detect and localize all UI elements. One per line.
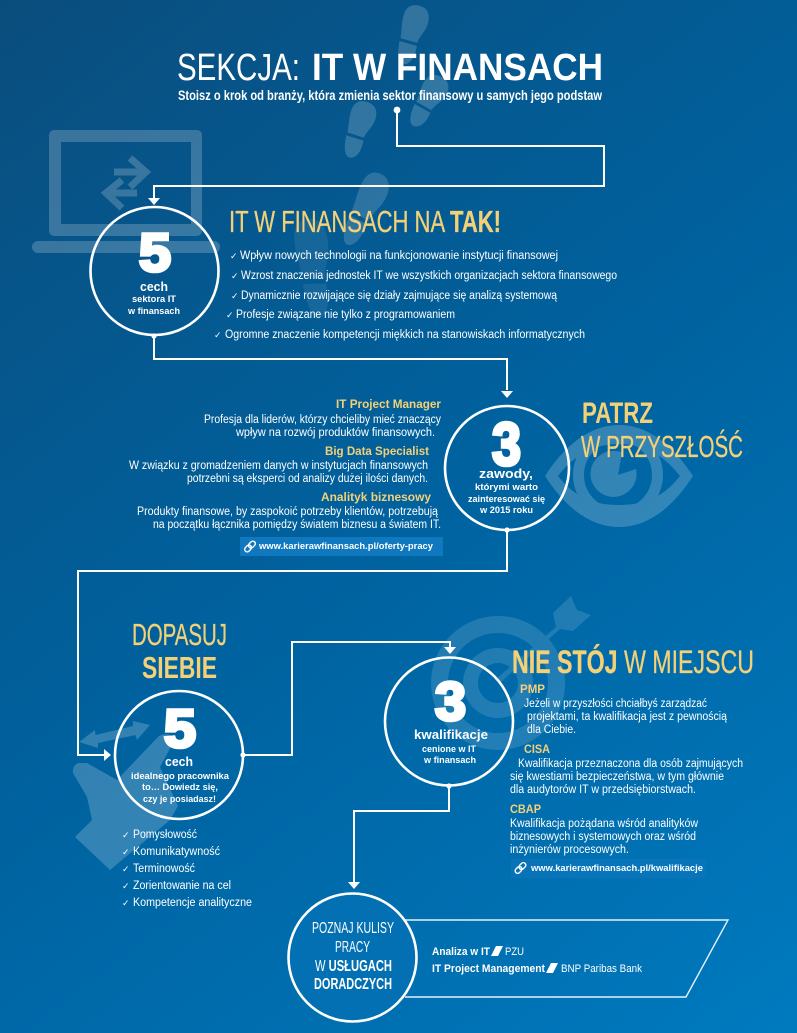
heading: dopasuj siebie: SIEBIE (142, 650, 217, 685)
callout: trapezoid: PZU (505, 946, 524, 958)
checklist: cechy pracownika: Komunikatywność (133, 846, 220, 858)
link box: kwalifikacje (511, 859, 706, 878)
circle: poznaj kulisy pracy: DORADCZYCH (314, 976, 392, 993)
qualifications: dla audytorów IT w przedsiębiorstwach. (510, 784, 696, 796)
circle: 5 cech pracownika: 5 (164, 699, 196, 759)
circle: 3 zawody: w 2015 roku (479, 505, 533, 515)
qualifications: się kwestiami bezpieczeństwa, w tym głównie (510, 771, 724, 783)
circle: 5 cech pracownika: cech (165, 754, 193, 769)
qualifications: PMP (520, 684, 545, 696)
connector: circle 4 to circle 5 (348, 783, 452, 889)
checklist: Wpływ nowych technologii na funkcjonowanie instytucji finansowej (240, 250, 558, 262)
checklist: ✓ (230, 252, 238, 262)
qualifications: projektami, ta kwalifikacja jest z pewnością (527, 711, 728, 723)
link box: kwalifikacje: www.karierawfinansach.pl/kwalifikacje (530, 863, 703, 874)
qualifications: biznesowych i systemowych oraz wśród (510, 831, 696, 843)
subtitle: Stoisz o krok od branży, która zmienia sektor finansowy u samych jego podstaw (178, 87, 602, 103)
panel: zawody: Big Data Specialist (325, 446, 429, 458)
checklist: Profesje związane nie tylko z programowaniem (236, 309, 455, 321)
circle: 3 kwalifikacje (385, 658, 513, 786)
circle: 5 cech sektora IT: cech (140, 279, 168, 294)
connector: circle 1 to circle 2 (151, 333, 513, 398)
checklist: cechy pracownika: Terminowość (133, 863, 195, 875)
title: SEKCJA: (177, 47, 300, 89)
circle: 5 cech pracownika (115, 691, 243, 819)
circle: poznaj kulisy pracy: PRACY (335, 939, 370, 956)
callout: trapezoid (405, 920, 728, 997)
qualifications: dla Ciebie. (527, 724, 576, 736)
circle: 3 zawody: zawody, (479, 466, 533, 481)
icon: laptop (32, 130, 220, 253)
circle: 5 cech sektora IT: sektora IT (132, 294, 177, 304)
heading: dopasuj siebie: DOPASUJ (132, 617, 227, 652)
panel: zawody: Profesja dla liderów, którzy chcieliby mieć znaczący (204, 414, 441, 426)
qualifications: Kwalifikacja pożądana wśród analityków (510, 818, 699, 830)
circle: 3 kwalifikacje: kwalifikacje (414, 728, 488, 742)
circle: poznaj kulisy pracy: POZNAJ KULISY (312, 920, 394, 937)
title (177, 47, 603, 89)
circle: 3 zawody: 3 (492, 411, 521, 478)
panel: IT w finansach na tak (214, 204, 617, 341)
circle: 3 zawody: zainteresować się (468, 494, 545, 504)
link box: oferty pracy: www.karierawfinansach.pl/oferty-pracy (258, 541, 434, 552)
checklist: cechy pracownika: ✓ (122, 899, 130, 909)
qualifications: Jeżeli w przyszłości chciałbyś zarządzać (524, 698, 707, 710)
checklist: ✓ (226, 311, 234, 321)
checklist: ✓ (231, 292, 239, 302)
panel: zawody: Analityk biznesowy (321, 492, 432, 504)
checklist: cechy pracownika: ✓ (122, 882, 130, 892)
circle: 3 zawody (445, 406, 569, 530)
panel: zawody: na początku łącznika pomiędzy światem biznesu a światem IT. (153, 519, 441, 531)
icon: eye (545, 425, 693, 527)
checklist: cechy pracownika: ✓ (122, 848, 130, 858)
checklist: ✓ (231, 272, 239, 282)
heading: dopasuj siebie (132, 617, 227, 685)
panel: nie stój w miejscu (510, 644, 754, 856)
icon: hand with double arrow (73, 721, 178, 870)
circle: 5 cech pracownika: czy je posiadasz! (143, 794, 216, 804)
connector: circle 2 to circle 3 (78, 527, 510, 761)
qualifications: CBAP (510, 804, 541, 816)
checklist: cechy pracownika (122, 829, 252, 909)
panel: zawody: W związku z gromadzeniem danych w instytucjach finansowych (129, 460, 428, 472)
qualifications: inżynierów procesowych. (510, 844, 629, 856)
connector: header to circle 1 (148, 107, 604, 205)
circle: 5 cech sektora IT: w finansach (127, 306, 180, 316)
circle: 3 zawody: którymi warto (475, 482, 539, 492)
callout: trapezoid: IT Project Management (432, 963, 545, 975)
icon: footprints (290, 4, 452, 320)
title: IT W FINANSACH (312, 47, 603, 89)
circle: 3 kwalifikacje: cenione w IT (422, 744, 476, 754)
circle: 5 cech sektora IT (90, 207, 218, 335)
checklist (214, 250, 617, 341)
callout: trapezoid: BNP Paribas Bank (561, 963, 642, 975)
circle: 3 kwalifikacje: w finansach (423, 755, 476, 765)
heading: IT W FINANSACH NA TAK! (229, 204, 501, 239)
panel: zawody: wpływ na rozwój produktów finansowych. (235, 427, 435, 439)
qualifications (510, 684, 743, 856)
callout: trapezoid: Analiza w IT (432, 946, 490, 958)
checklist: cechy pracownika: ✓ (122, 831, 130, 841)
circle: 3 kwalifikacje: 3 (435, 672, 466, 732)
checklist: cechy pracownika: Pomysłowość (133, 829, 197, 841)
icon: target (431, 596, 591, 750)
panel: zawody: IT Project Manager (336, 399, 442, 411)
panel: zawody: Produkty finansowe, by zaspokoić potrzeby klientów, potrzebują (137, 506, 439, 518)
checklist: Wzrost znaczenia jednostek IT we wszystkich organizacjach sektora finansowego (241, 270, 617, 282)
circle: poznaj kulisy pracy: W USŁUGACH (315, 958, 392, 975)
connector: circle 3 to circle 4 (240, 642, 456, 758)
checklist: cechy pracownika: Zorientowanie na cel (133, 880, 231, 892)
qualifications: CISA (524, 744, 550, 756)
circle: 5 cech pracownika: idealnego pracownika (131, 771, 230, 781)
checklist: ✓ (214, 331, 222, 341)
circle: poznaj kulisy pracy (288, 894, 416, 1022)
circle: 5 cech sektora IT: 5 (139, 223, 171, 283)
heading: patrz w przyszłość: PATRZ (582, 397, 653, 430)
checklist: cechy pracownika: Kompetencje analityczne (133, 897, 252, 909)
heading: patrz w przyszłość (581, 397, 743, 464)
panel: zawody (129, 399, 442, 531)
link box: oferty pracy (240, 537, 443, 556)
panel: zawody: potrzebni są eksperci od analizy dużej ilości danych. (187, 473, 428, 485)
qualifications: Kwalifikacja przeznaczona dla osób zajmujących (518, 758, 743, 770)
checklist: Ogromne znaczenie kompetencji miękkich na stanowiskach informatycznych (225, 329, 585, 341)
checklist: Dynamicznie rozwijające się działy zajmujące się analizą systemową (241, 290, 558, 302)
checklist: cechy pracownika: ✓ (122, 865, 130, 875)
circle: 5 cech pracownika: to… Dowiedz się, (142, 782, 218, 792)
